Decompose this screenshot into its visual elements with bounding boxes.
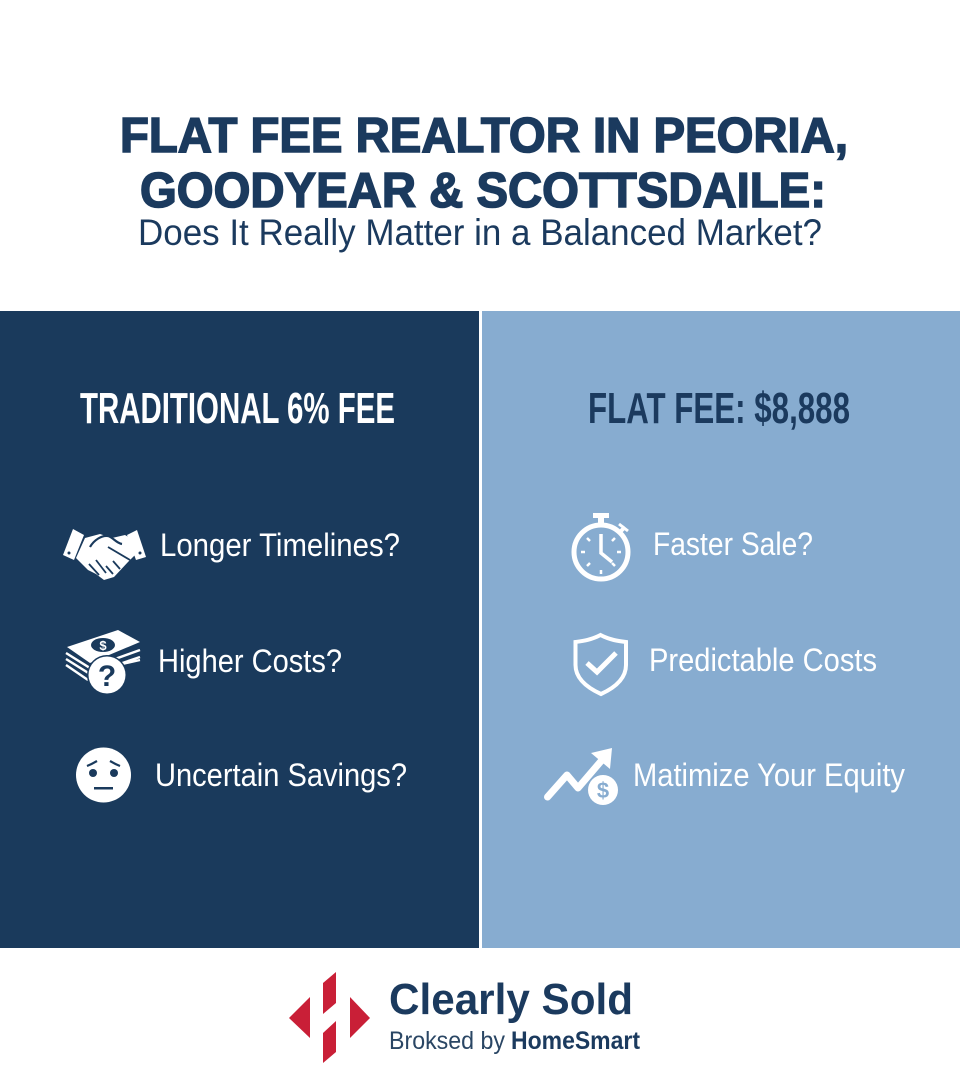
brand name: Clearly Sold (389, 975, 633, 1024)
icon: rising arrow with dollar (548, 748, 618, 805)
label: uncertain savings: Uncertain Savings? (155, 757, 407, 793)
icon: stopwatch (574, 513, 628, 579)
icon: money with question mark: ? (98, 660, 116, 693)
label: longer timelines: Longer Timelines? (160, 527, 400, 563)
title line 1: FLAT FEE REALTOR IN PEORIA, (120, 109, 848, 163)
panel: traditional 6% fee (0, 311, 479, 948)
label: higher costs: Higher Costs? (158, 643, 342, 679)
heading: traditional: TRADITIONAL 6% FEE (80, 384, 395, 433)
heading: flat fee: FLAT FEE: $8,888 (588, 384, 850, 433)
label: predictable costs: Predictable Costs (649, 642, 877, 678)
title block (120, 109, 848, 253)
icon: shield with check (576, 635, 626, 694)
logo mark (289, 972, 370, 1063)
label: faster sale: Faster Sale? (653, 526, 813, 562)
icon: money with question mark: $ (99, 638, 107, 653)
icon: money with question mark (66, 630, 140, 695)
tagline brand: HomeSmart (511, 1027, 641, 1055)
icon: worried face (76, 748, 131, 802)
tagline: Broksed by (389, 1027, 505, 1055)
label: maximize equity: Matimize Your Equity (633, 757, 905, 793)
title line 2: GOODYEAR & SCOTTSDAILE: (140, 164, 826, 218)
panel: flat fee $8,888 (482, 311, 960, 948)
logo: clearly sold (289, 972, 641, 1063)
subtitle: Does It Really Matter in a Balanced Market? (138, 212, 822, 253)
icon: handshake (63, 529, 146, 580)
icon: rising arrow with dollar: $ (597, 778, 609, 803)
